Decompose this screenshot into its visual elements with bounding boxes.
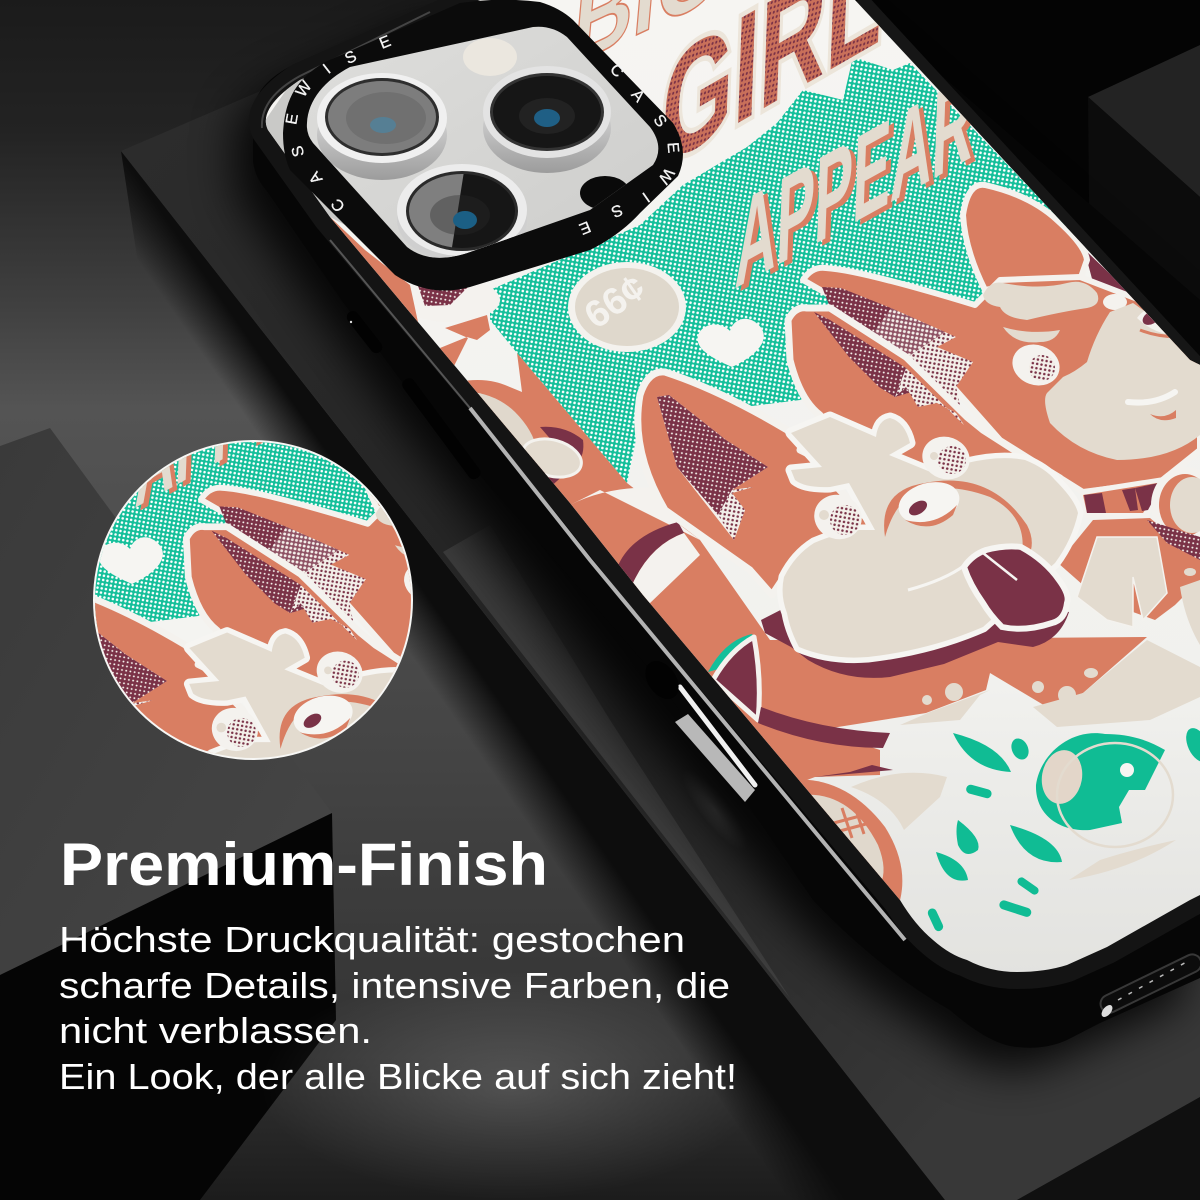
left paw bbox=[522, 437, 583, 479]
green eye ball bbox=[1036, 733, 1173, 847]
left block top surface bbox=[0, 428, 332, 975]
print base white bbox=[250, 0, 1200, 980]
island brand text: W bbox=[293, 78, 316, 100]
ball bbox=[798, 780, 902, 900]
left paw cream bbox=[477, 392, 534, 456]
maroon chin shadow bbox=[761, 600, 1069, 678]
under-island maroon shape bbox=[400, 286, 500, 314]
island brand text: E bbox=[283, 112, 302, 126]
body text: Höchste Druckqualität: gestochen bbox=[59, 919, 685, 960]
teal halftone field bbox=[490, 57, 1070, 483]
island brand text: S bbox=[342, 48, 360, 68]
flash bbox=[463, 38, 517, 76]
island brand text: C bbox=[606, 61, 627, 81]
island brand text bbox=[283, 33, 681, 237]
maroon body stripe bbox=[758, 707, 890, 748]
tail white stripe bbox=[632, 533, 700, 605]
island brand text: I bbox=[639, 188, 652, 205]
second dog forehead cream bbox=[983, 282, 1098, 320]
body text: nicht verblassen. bbox=[59, 1010, 372, 1051]
dog face cream bbox=[783, 417, 1078, 658]
left orange edge strip bbox=[330, 217, 418, 322]
camera island bbox=[283, 0, 683, 291]
tail maroon stripe bbox=[617, 522, 684, 585]
orange body bbox=[445, 353, 1147, 790]
heart bbox=[698, 319, 764, 367]
dog ear bbox=[638, 372, 878, 595]
green leaves and dashes bbox=[926, 724, 1200, 933]
island brand text: S bbox=[609, 200, 625, 220]
second dog left eye bbox=[1007, 338, 1065, 392]
artwork bbox=[330, 0, 1200, 933]
lens two bbox=[483, 66, 611, 173]
cream bottom fur bbox=[900, 690, 990, 725]
cream paw bbox=[851, 773, 947, 830]
collar bbox=[1080, 476, 1170, 518]
bottom teal sliver ear bbox=[708, 634, 756, 672]
orange chest spot bbox=[1184, 568, 1196, 576]
right eye bbox=[894, 476, 964, 530]
bottom maroon ear bbox=[713, 637, 759, 720]
top right block face bbox=[1088, 97, 1200, 420]
brow crescent bbox=[884, 481, 1032, 570]
dog right ear dark halftone bbox=[814, 312, 925, 397]
second dog forehead blob bbox=[1003, 327, 1060, 342]
lens three bbox=[397, 164, 527, 262]
second dog chest cream bbox=[1077, 537, 1167, 627]
circular detail magnifier bbox=[0, 124, 604, 1133]
island brand text: W bbox=[654, 165, 677, 187]
tongue bbox=[964, 546, 1068, 629]
rim dark inner line bbox=[858, 0, 1200, 371]
second dog face cream bbox=[1045, 303, 1200, 460]
left block front face bbox=[0, 813, 336, 1200]
coin 99 cents bbox=[568, 262, 686, 352]
second dog smile bbox=[1128, 392, 1176, 420]
top right block surface bbox=[1088, 45, 1200, 197]
top rim highlight bbox=[262, 12, 430, 128]
side slot: upper bbox=[344, 309, 385, 355]
white face outline backing bbox=[783, 417, 1078, 658]
second dog white spot bbox=[1103, 294, 1127, 310]
grey strip beside camera island bbox=[266, 78, 345, 225]
lit strip along block edge bbox=[443, 525, 790, 998]
top right black backdrop bbox=[845, 0, 1200, 400]
side slot: long button bbox=[400, 376, 483, 482]
island brand text: C bbox=[328, 195, 349, 215]
island brand text: A bbox=[306, 168, 326, 187]
left eye bbox=[808, 488, 868, 546]
case rim bbox=[266, 0, 1200, 972]
second dog body orange bbox=[1058, 518, 1200, 620]
second dog far ear bbox=[963, 185, 1087, 290]
orange tail flecks bbox=[440, 315, 490, 368]
dog right ear light halftone bbox=[895, 368, 964, 425]
silver side highlight bbox=[470, 408, 905, 940]
lower right block face bbox=[1017, 1097, 1200, 1200]
dog ear light halftone bbox=[718, 487, 753, 540]
lower right cream limb bbox=[1180, 580, 1200, 645]
main block front face bbox=[121, 151, 945, 1200]
coin 99 cents: 66¢ bbox=[577, 267, 653, 337]
island brand text: A bbox=[628, 87, 648, 106]
second dog ear light halftone bbox=[900, 332, 973, 423]
island brand text: I bbox=[320, 61, 334, 78]
lower right cream fur bbox=[1033, 640, 1200, 727]
dog ear halftone base bbox=[657, 395, 768, 540]
body text: scharfe Details, intensive Farben, die bbox=[59, 965, 730, 1006]
island frame bbox=[283, 0, 683, 291]
faint upper side line bbox=[330, 240, 470, 408]
island brand text: S bbox=[289, 144, 308, 159]
second dog right eye bbox=[1137, 306, 1195, 337]
window glass bbox=[307, 27, 658, 258]
body halftone bbox=[1147, 520, 1200, 560]
second dog ear mid halftone bbox=[870, 308, 945, 362]
body text bbox=[59, 919, 737, 1097]
lens one bbox=[317, 73, 447, 180]
island brand text: E bbox=[664, 142, 681, 154]
phone case body bbox=[253, 0, 1200, 1048]
title: Premium-Finish bbox=[60, 831, 548, 898]
second dog far ear shadow bbox=[1088, 252, 1130, 296]
charging port bbox=[1098, 951, 1200, 1019]
maroon lower stripe bbox=[815, 765, 893, 777]
island brand text: E bbox=[577, 217, 593, 237]
upper eye bbox=[916, 430, 976, 486]
second dog head orange bbox=[803, 268, 1200, 492]
orange fur spots bbox=[922, 668, 1098, 705]
central floor glow bbox=[260, 970, 760, 1200]
island brand text: E bbox=[377, 33, 393, 53]
second dog ear dark halftone bbox=[822, 287, 891, 338]
dog right ear bbox=[788, 308, 1060, 500]
lit patch beside side button bbox=[673, 762, 757, 858]
phone print area bbox=[250, 0, 1200, 980]
body text: Ein Look, der alle Blicke auf sich zieht! bbox=[59, 1056, 737, 1097]
side metal button bbox=[638, 655, 755, 802]
left maroon curl bbox=[540, 426, 584, 484]
dog ear dark halftone bbox=[657, 395, 768, 515]
phone drop shadow bbox=[235, 22, 1182, 1070]
tail white fluff bbox=[570, 488, 700, 540]
cream wisp bbox=[1069, 840, 1176, 880]
island brand text: S bbox=[650, 112, 670, 131]
muzzle line bbox=[908, 565, 965, 590]
microphone hole bbox=[580, 176, 630, 210]
collar tag bbox=[1151, 467, 1200, 543]
